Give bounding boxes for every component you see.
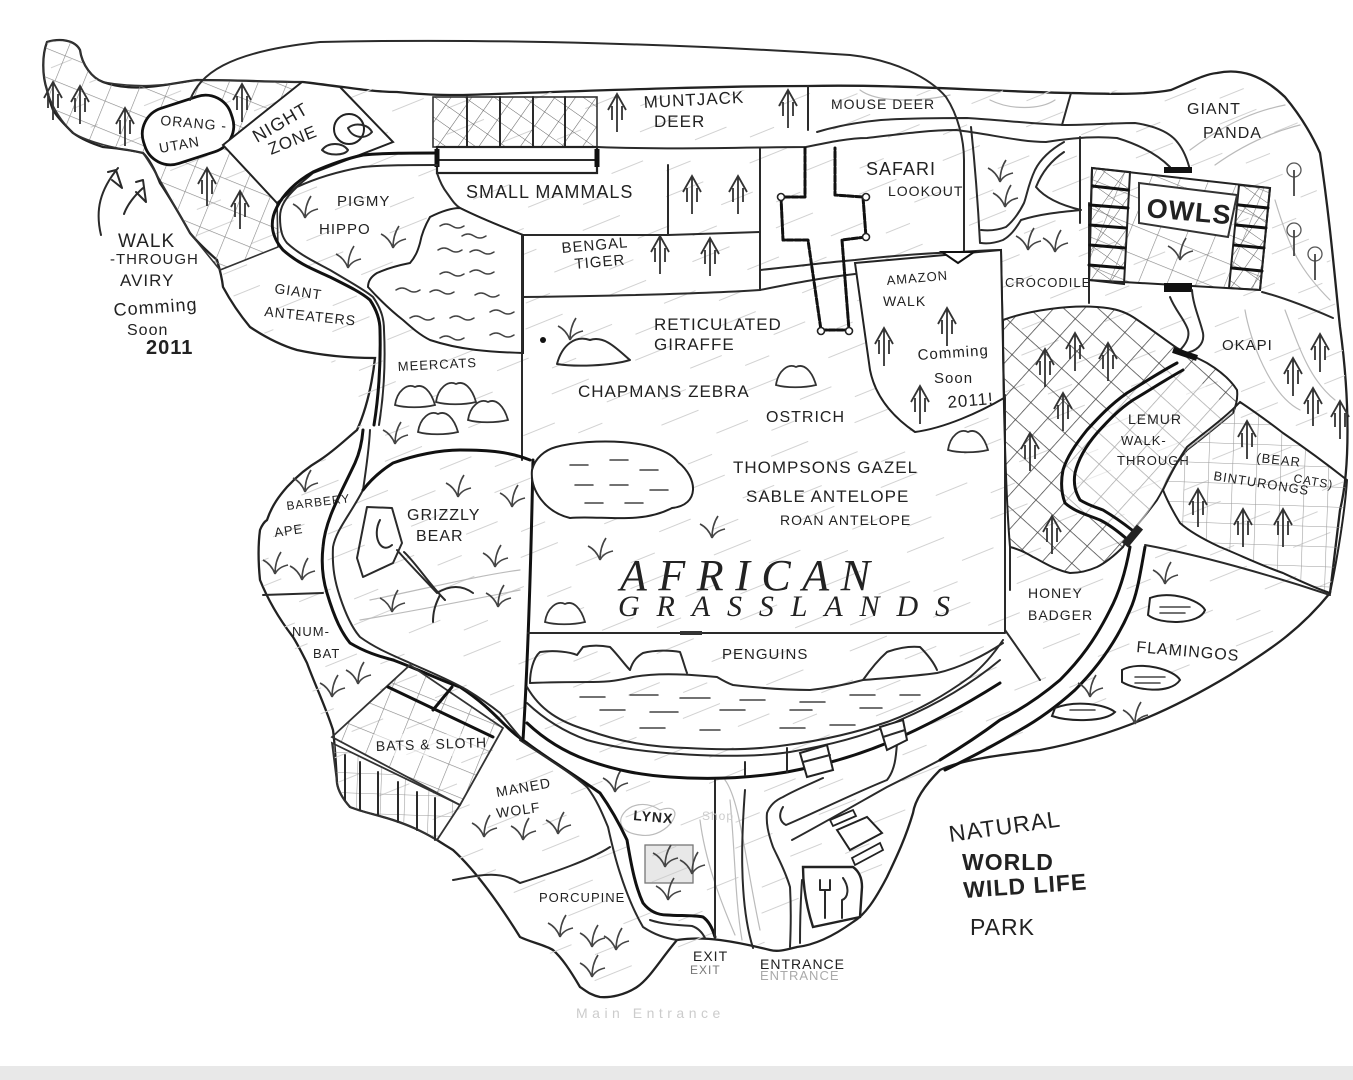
panel: maned wolf [453,775,610,883]
panel: pigmy hippo: PIGMY [337,193,390,210]
panel: african grasslands [522,235,1005,740]
panel: night zone [223,82,393,203]
panel: african grasslands: ROAN ANTELOPE [780,512,911,528]
label: num-bat: BAT [313,646,340,661]
title: WILD LIFE [963,868,1088,903]
label: giant panda: PANDA [1203,125,1262,142]
aviary note [99,168,199,359]
label: crocodile [988,160,1091,290]
title: PARK [970,914,1035,940]
panel: amazon walk: WALK [883,293,926,309]
panel: amazon walk: Comming [917,342,989,364]
penguins [527,640,1003,778]
aviary note: -THROUGH [110,251,199,268]
panel: african grasslands: THOMPSONS GAZEL [733,458,918,477]
panel: amazon walk: AMAZON [886,268,949,288]
panel: night zone: NIGHT [249,99,312,146]
hippo pool [368,208,523,353]
label: honey badger: BADGER [1028,607,1093,623]
panel: african grasslands: AFRICAN [617,551,873,600]
label: crocodile: CROCODILE [1005,275,1091,290]
orang-utan enclosure: ORANG - [160,112,228,134]
panel: bats and sloth [332,665,503,840]
panel: safari lookout: SAFARI [866,159,936,179]
panel: african grasslands: GRASSLANDS [618,590,950,623]
panel: walk-through aviary [43,40,303,270]
panel: african grasslands: GIRAFFE [654,335,735,354]
label: muntjac deer: MUNTJACK [643,88,745,112]
exit and entrance labels: ENTRANCE [760,956,845,972]
panel: flamingos: FLAMINGOS [1136,639,1240,665]
exit and entrance labels: EXIT [690,963,721,977]
panel: amazon walk [855,250,1004,432]
label: giant anteaters: GIANT [274,280,323,303]
label: barbery ape [263,470,351,580]
aviary note: WALK [118,231,175,252]
panel: grizzly bear: GRIZZLY [407,507,480,524]
panel: meercats [383,355,508,444]
label: honey badger [1005,547,1093,680]
pencil shading [360,90,1335,940]
panel: lynx: Shop [702,809,734,823]
title [947,806,1088,940]
arrow: sky walkway [190,41,974,263]
panel: african grasslands: CHAPMANS ZEBRA [578,382,750,401]
panel: small mammals hatched cage: SMALL MAMMALS [466,182,633,202]
label: giant panda: GIANT [1187,101,1241,118]
panel: african grasslands: RETICULATED [654,315,782,334]
label: giant anteaters: ANTEATERS [264,303,357,329]
title: NATURAL [947,806,1062,847]
panel: african grasslands: SABLE ANTELOPE [746,487,909,506]
panel: safari lookout [683,148,963,334]
panel: lemur walk-through: LEMUR [1128,411,1182,427]
label: okapi [1170,290,1349,439]
exit and entrance labels [576,948,845,1021]
label: barbery ape: BARBERY [286,491,351,513]
exit and entrance labels: ENTRANCE [760,968,840,983]
panel: binturongs: (BEAR [1256,450,1302,470]
label: muntjac deer: DEER [654,112,705,131]
panel: pigmy hippo [293,193,406,268]
panel: lynx [603,770,734,937]
panel: lemur walk-through: THROUGH [1117,453,1190,468]
aviary note: Comming [113,294,198,320]
panel: binturongs: CATS) [1292,471,1334,492]
label: bengal tiger: BENGAL [561,234,629,257]
aviary note: AVIRY [120,271,174,290]
panel: flamingos [940,545,1330,770]
panel: owls [1089,167,1270,292]
panel: maned wolf: WOLF [495,799,541,821]
aviary note: 2011 [146,337,193,359]
panel: pigmy hippo: HIPPO [319,221,371,238]
label: num-bat [263,593,371,697]
panel: night zone: ZONE [265,122,320,159]
exit and entrance labels: Main Entrance [576,1005,725,1021]
panel: binturongs [1163,402,1347,593]
title: WORLD [962,849,1054,875]
entrance path and restaurant [742,720,940,948]
penguins: PENGUINS [722,646,808,663]
panel: owls: OWLS [1145,193,1233,230]
exit and entrance labels: EXIT [693,948,728,964]
panel: bats and sloth: BATS & SLOTH [376,734,487,754]
orang-utan enclosure: UTAN [158,133,201,156]
panel: grizzly bear: BEAR [416,528,464,545]
panel: lemur walk-through [1003,307,1237,573]
orang-utan enclosure [135,88,241,172]
label: giant anteaters [264,280,357,329]
panel: lynx: LYNX [633,807,674,826]
label: giant panda [1187,101,1322,280]
label: muntjac deer [608,88,797,132]
label: okapi: OKAPI [1222,337,1273,354]
panel: meercats: MEERCATS [397,355,477,374]
panel: grizzly bear [357,450,530,622]
label: honey badger: HONEY [1028,585,1083,601]
panel: small mammals hatched cage [433,97,633,202]
panel: amazon walk: Soon [934,370,973,387]
label: barbery ape: APE [273,521,304,540]
aviary note: Soon [127,322,168,339]
label: mouse deer: MOUSE DEER [831,96,935,112]
label: num-bat: NUM- [292,624,330,639]
panel: binturongs: BINTURONGS [1213,468,1310,498]
icon: restaurant [803,867,862,927]
panel: maned wolf: MANED [495,775,552,800]
panel: safari lookout: LOOKOUT [888,183,963,199]
label: porcupine [539,890,629,977]
label: bengal tiger [561,234,719,276]
panel: amazon walk: 2011! [947,389,994,412]
panel: lemur walk-through: WALK- [1121,433,1167,448]
main paths and enclosure lines [272,86,1190,940]
label: porcupine: PORCUPINE [539,890,625,905]
panel: african grasslands: OSTRICH [766,409,845,426]
label: bengal tiger: TIGER [574,252,626,273]
